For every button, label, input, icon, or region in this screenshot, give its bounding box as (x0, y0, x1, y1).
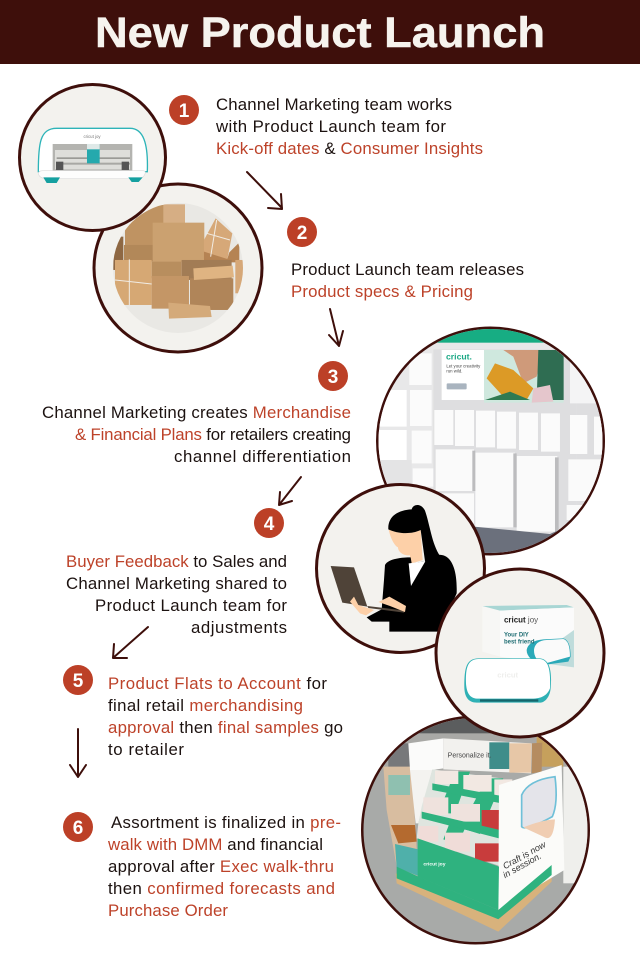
step 4 text: Product Launch team for (95, 596, 287, 615)
wall banner: cricut. (446, 351, 472, 361)
step 6 text: Assortment is finalized in pre- (111, 813, 341, 832)
photo circle: boxes (94, 184, 262, 352)
photo circle: Cricut Joy product box: Your DIY (504, 633, 529, 639)
step 3 text: Channel Marketing creates Merchandise (42, 403, 351, 422)
step 1 text: Kick-off dates & Consumer Insights (216, 139, 483, 158)
step 3 text: channel differentiation (174, 447, 351, 466)
header banner (0, 0, 640, 64)
photo circle: Cricut Joy machine (20, 84, 166, 230)
wall banner: Let your creativity (446, 363, 481, 368)
step 5 text: Product Flats to Account for (108, 674, 327, 693)
step 2 number badge (287, 217, 317, 247)
step 1 text: Channel Marketing team works (216, 95, 452, 114)
photo circle: Cricut Joy machine: cricut joy (83, 134, 101, 139)
display unit: Personalize it. (448, 752, 492, 759)
step 6 text: then confirmed forecasts and (108, 879, 335, 898)
photo circle: Cricut Joy product box: cricut joy (504, 616, 538, 625)
arrow: step 5 to 6 (70, 729, 86, 777)
arrow: step 2 to 3 (329, 309, 343, 346)
step 6 text: walk with DMM and financial (107, 835, 323, 854)
wall banner: run wild. (446, 369, 462, 374)
step 2 text: Product Launch team releases (291, 260, 524, 279)
step 3 text: & Financial Plans for retailers creating (75, 425, 351, 444)
step 2 text: Product specs & Pricing (291, 282, 473, 301)
step 6 text: Purchase Order (108, 901, 228, 920)
step 5 text: approval then final samples go (108, 718, 343, 737)
photo circle: woman with laptop (316, 484, 484, 652)
step 6 text: approval after Exec walk-thru (108, 857, 334, 876)
arrow: step 1 to 2 (247, 172, 282, 209)
step 5 number badge (63, 665, 93, 695)
step 1 number badge: 1 (179, 101, 190, 122)
step 1 text: with Product Launch team for (215, 117, 446, 136)
step 4 number badge: 4 (264, 514, 275, 535)
display unit: Craft is now (501, 839, 548, 871)
step 1 text (215, 95, 483, 158)
step 4 text: adjustments (191, 618, 287, 637)
wall banner (442, 350, 564, 403)
title: New Product Launch (95, 9, 545, 57)
photo circle: retail wall display (370, 320, 610, 560)
step 5 number badge: 5 (73, 671, 84, 692)
display unit (383, 738, 564, 932)
step 4 text (66, 552, 287, 637)
arrow: step 4 to 5 (113, 627, 148, 658)
step 6 number badge (63, 812, 93, 842)
step 4 text: Channel Marketing shared to (66, 574, 287, 593)
step 3 text (42, 403, 351, 466)
step 3 number badge (318, 361, 348, 391)
step 2 number badge: 2 (297, 223, 307, 244)
step 4 text: Buyer Feedback to Sales and (66, 552, 287, 571)
step 5 text: to retailer (108, 740, 184, 759)
step 5 text: final retail merchandising (108, 696, 303, 715)
step 6 number badge: 6 (73, 818, 83, 839)
step 4 number badge (254, 508, 284, 538)
photo circle: Cricut Joy product box: best friend (504, 639, 535, 645)
step 3 number badge: 3 (328, 367, 338, 388)
photo circle: retail pallet display (355, 710, 595, 950)
step 1 number badge (169, 95, 199, 125)
arrow: step 3 to 4 (279, 477, 301, 505)
step 2 text (291, 260, 524, 301)
photo circle: Cricut Joy product box: cricut (497, 670, 519, 679)
display unit: in session. (501, 851, 543, 880)
photo circle: Cricut Joy product box (436, 569, 604, 737)
step 6 text (107, 813, 341, 920)
display unit: cricut joy (423, 861, 446, 867)
step 5 text (108, 674, 343, 759)
